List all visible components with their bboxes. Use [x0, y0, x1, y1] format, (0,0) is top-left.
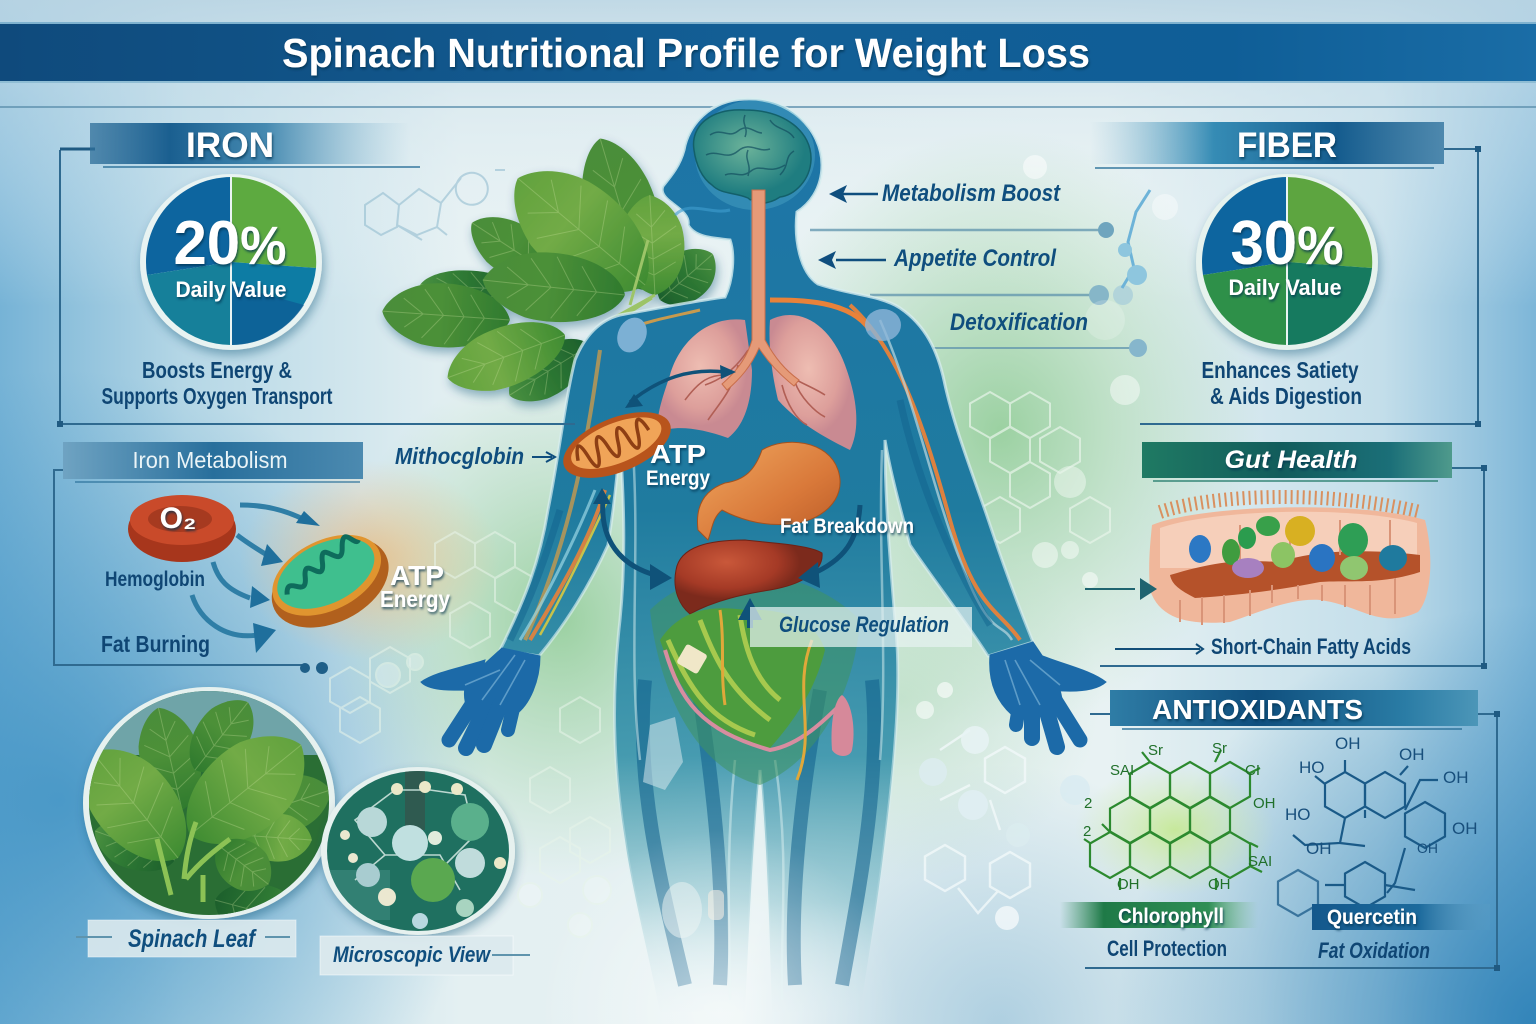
arm vessels — [510, 300, 1020, 640]
fiber pie chart — [1196, 174, 1378, 350]
fiber heading: FIBER — [1237, 126, 1337, 165]
bubbles and connector lines right of body — [810, 155, 1178, 588]
neck and face vessels — [675, 200, 752, 300]
label: Detoxification: Detoxification — [950, 309, 1088, 336]
chlorophyll molecule: Sr — [1148, 742, 1163, 759]
iron metabolism heading: Iron Metabolism — [132, 447, 288, 473]
gut arrow — [1085, 588, 1135, 590]
body energy label: Energy — [646, 467, 710, 490]
panel: fiber — [1090, 122, 1481, 427]
label: Metabolism Boost — [829, 180, 1061, 207]
chlorophyll molecule: 2 — [1083, 823, 1091, 840]
liver — [675, 540, 822, 614]
fiber description: Enhances Satiety — [1202, 357, 1359, 383]
quercetin molecule: OH — [1399, 745, 1424, 764]
faint molecule top left — [365, 170, 505, 240]
circular arrows around liver — [603, 500, 860, 575]
arrow heads around liver — [593, 488, 820, 620]
body silhouette — [500, 99, 1033, 1012]
iron percent: 20% — [174, 209, 286, 278]
abdomen green — [650, 574, 860, 785]
hand veins — [465, 655, 1060, 705]
chlorophyll molecule: 2 — [1084, 795, 1092, 812]
quercetin band — [1312, 904, 1490, 930]
quercetin molecule: HO — [1299, 758, 1324, 777]
spinach bunch — [380, 128, 729, 416]
lung arrow — [630, 371, 725, 402]
panel: fiber: & Aids Digestion — [1210, 383, 1362, 409]
gut illustration — [1149, 497, 1430, 625]
ATP: ATP — [390, 560, 444, 591]
label: Glucose Regulation: Glucose Regulation — [779, 612, 949, 637]
lower body fade — [540, 830, 900, 1024]
antioxidants heading: ANTIOXIDANTS — [1152, 694, 1363, 725]
panel: iron — [57, 123, 575, 427]
chlorophyll molecule: SAI — [1248, 853, 1272, 870]
label: microscopic view — [320, 936, 530, 975]
shoulder joints — [612, 313, 652, 357]
iron metabolism band — [63, 442, 363, 479]
label: microscopic view: Microscopic View — [333, 942, 492, 967]
arrows to mitochondrion — [192, 505, 305, 636]
label: Mithocglobin: Mithocglobin — [395, 443, 524, 469]
panel: spinach leaf photo — [82, 687, 342, 920]
quercetin molecule: OH — [1306, 839, 1332, 858]
fiber heading band — [1090, 122, 1444, 164]
arrow heads — [250, 511, 320, 653]
trachea and bronchi — [722, 190, 799, 390]
panel: antioxidants — [1060, 690, 1500, 971]
cell protection: Cell Protection — [1107, 936, 1227, 961]
title: Spinach Nutritional Profile for Weight Loss — [282, 30, 1090, 76]
left hand — [421, 648, 540, 748]
quercetin molecule: OH — [1417, 840, 1438, 856]
label: Appetite Control: Appetite Control — [893, 245, 1057, 272]
quercetin molecule — [1278, 734, 1478, 916]
label: spinach leaf: Spinach Leaf — [128, 925, 257, 953]
chlorophyll molecule — [1075, 740, 1276, 895]
intestines — [660, 608, 854, 780]
red blood cell: O₂ — [160, 502, 196, 535]
fiber percent: 30% — [1230, 209, 1344, 278]
label: spinach leaf — [76, 920, 296, 957]
lung arrow heads — [625, 365, 736, 408]
iron heading: IRON — [186, 126, 274, 165]
chlorophyll band — [1060, 902, 1258, 928]
short-chain fatty acids: Short-Chain Fatty Acids — [1211, 634, 1411, 659]
chlorophyll molecule: Sr — [1212, 740, 1227, 757]
white hexagon network right — [970, 392, 1110, 543]
energy: Energy — [380, 586, 450, 612]
mitochondrion green — [256, 517, 403, 646]
panel: iron metabolism — [54, 442, 450, 674]
panel: iron: Supports Oxygen Transport — [102, 383, 333, 409]
iron heading band — [90, 123, 410, 164]
hemoglobin: Hemoglobin — [105, 568, 205, 591]
title banner — [0, 22, 1536, 83]
fat oxidation: Fat Oxidation — [1318, 938, 1430, 963]
gut heading: Gut Health — [1224, 446, 1358, 474]
molecules lower right of body — [916, 682, 1090, 930]
brain — [694, 110, 811, 203]
chlorophyll molecule: CI — [1245, 762, 1260, 779]
stomach — [697, 442, 840, 540]
iron description: Boosts Energy & — [142, 357, 292, 383]
panel: gut health — [1085, 442, 1487, 669]
head glow — [695, 100, 815, 210]
chlorophyll molecule: OH — [1253, 795, 1276, 812]
chlorophyll label: Chlorophyll — [1118, 905, 1224, 928]
label: Appetite Control — [818, 245, 1057, 272]
leg stripes — [643, 680, 874, 985]
label: Fat Breakdown: Fat Breakdown — [780, 515, 914, 538]
quercetin molecule: OH — [1335, 734, 1360, 753]
panel: microscopic view — [320, 765, 520, 935]
label: Glucose Regulation — [750, 607, 972, 647]
right hand — [990, 642, 1106, 747]
mitochondrion body — [554, 399, 710, 491]
label: Metabolism Boost: Metabolism Boost — [882, 180, 1061, 207]
fat burning: Fat Burning — [101, 631, 210, 657]
iron daily value: Daily Value — [176, 277, 286, 302]
red blood cell — [128, 495, 236, 562]
body ATP label: ATP — [650, 439, 706, 469]
antioxidants band — [1110, 690, 1478, 726]
human body — [421, 99, 1106, 1024]
chlorophyll molecule: SAI — [1110, 762, 1134, 779]
gut heading band — [1142, 442, 1452, 478]
chlorophyll molecule: OH — [1117, 876, 1140, 893]
ghost organs on legs — [643, 717, 683, 790]
white hexagon network left — [330, 532, 611, 937]
quercetin label: Quercetin — [1327, 906, 1417, 929]
iron pie chart — [140, 174, 322, 350]
chlorophyll molecule: OH — [1208, 876, 1230, 893]
fiber daily value: Daily Value — [1228, 275, 1342, 300]
lungs — [658, 315, 856, 450]
quercetin molecule: OH — [1443, 768, 1468, 787]
quercetin molecule: OH — [1452, 819, 1478, 838]
short-chain arrow — [1115, 644, 1203, 654]
quercetin molecule: HO — [1285, 805, 1310, 824]
